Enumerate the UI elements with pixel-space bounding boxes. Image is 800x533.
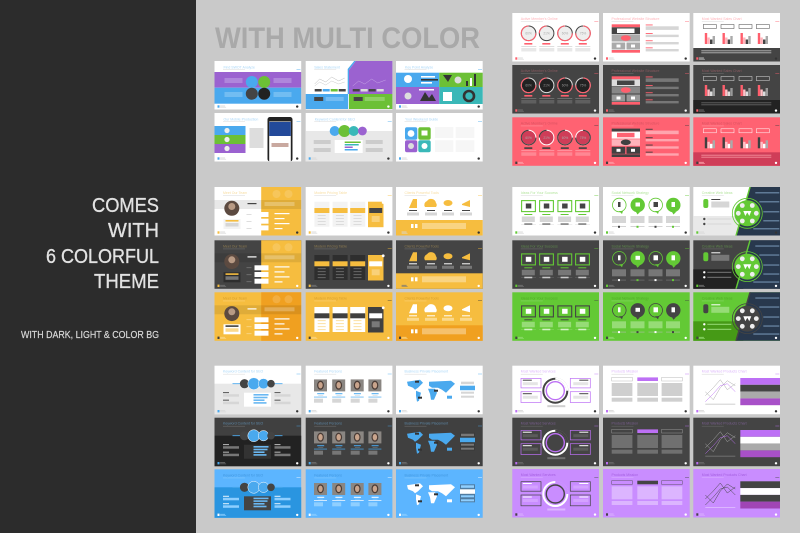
slide: yellow tools dark bbox=[396, 240, 483, 289]
slide: blue seo color bbox=[214, 469, 301, 518]
slide: green social light bbox=[603, 187, 690, 236]
slide: red chart light: Most Wanted Sales Chart bbox=[702, 17, 742, 21]
slide: purple chart color bbox=[693, 469, 780, 518]
slide: red rings light: Active Member's Online bbox=[521, 17, 558, 21]
slide: blue seo color: Keyword Content for SEO bbox=[223, 473, 264, 477]
slide: yellow pricing light: Modern Pricing Table bbox=[314, 191, 347, 195]
slide: purple mission light bbox=[603, 366, 690, 414]
slide: mobile: Our Mobile Production bbox=[224, 118, 258, 122]
slide: yellow pricing color bbox=[306, 292, 392, 341]
slide: red structure dark bbox=[603, 65, 690, 114]
slide: purple mission dark bbox=[603, 418, 690, 466]
slide: purple services light bbox=[512, 366, 599, 414]
slide: yellow pricing light bbox=[306, 187, 392, 236]
slide: green social color: Social Network Strategy bbox=[612, 296, 649, 300]
slide: mobile bbox=[214, 113, 301, 162]
slide: yellow team light bbox=[214, 187, 301, 236]
slide: yellow tools light bbox=[396, 187, 483, 236]
slide: swot: Find SWOT Analyze bbox=[224, 66, 255, 70]
slide: sales: Sales Statement bbox=[314, 66, 340, 70]
slide: yellow pricing color: Modern Pricing Table bbox=[314, 296, 347, 300]
slide: blue map light bbox=[396, 366, 483, 414]
slide: green ideas color bbox=[512, 292, 599, 341]
slide: weekend: Your Weekend Guide bbox=[405, 118, 438, 122]
slide: swot bbox=[214, 61, 301, 110]
slide: red rings dark: Active Member's Online bbox=[521, 69, 558, 73]
sidebar subheading: WITH DARK, LIGHT & COLOR BG bbox=[21, 329, 159, 341]
slide: blue seo dark bbox=[214, 418, 301, 466]
slide: blue map light: Business Private Placement bbox=[404, 370, 448, 374]
slide: red chart dark bbox=[693, 65, 780, 114]
slide: green web dark: Creative Web Ideas bbox=[702, 244, 733, 248]
slide: yellow tools color: Clients Powerful Tools bbox=[404, 296, 439, 300]
slide: weekend bbox=[396, 113, 483, 162]
slide: red structure color bbox=[603, 117, 690, 166]
sidebar headline: 6 COLORFUL bbox=[46, 246, 159, 268]
slide: yellow pricing dark: Modern Pricing Table bbox=[314, 244, 347, 248]
slide: red chart color bbox=[693, 117, 780, 166]
sidebar headline bbox=[46, 195, 159, 293]
slide: red structure color: Professional Website Structure bbox=[612, 121, 660, 125]
slide: purple mission dark: Products Mission bbox=[612, 422, 638, 426]
slide: yellow tools light: Clients Powerful Tools bbox=[404, 191, 439, 195]
slide: blue map dark bbox=[396, 418, 483, 466]
slide: purple chart light: Most Wanted Products Chart bbox=[702, 370, 747, 374]
red theme group bbox=[512, 13, 780, 166]
slide: yellow tools dark: Clients Powerful Tools bbox=[404, 244, 439, 248]
slide: red structure dark: Professional Website Structure bbox=[612, 69, 660, 73]
slide: yellow team dark bbox=[214, 240, 301, 289]
slide: blue persons light: Featured Persons bbox=[314, 370, 342, 374]
slide: purple chart light bbox=[693, 366, 780, 414]
yellow theme group bbox=[214, 187, 483, 341]
slide: purple services dark bbox=[512, 418, 599, 466]
left dark sidebar bbox=[0, 0, 196, 533]
slide: blue persons color bbox=[306, 469, 392, 518]
slide: red rings color: Active Member's Online bbox=[521, 121, 558, 125]
slide: red chart color: Most Wanted Sales Chart bbox=[702, 121, 742, 125]
slide: yellow team light: Meet Our Team bbox=[223, 191, 247, 195]
slide: yellow team color: Meet Our Team bbox=[223, 296, 247, 300]
slide: green ideas color: Ideas For Your Success bbox=[521, 296, 558, 300]
slide: yellow tools color bbox=[396, 292, 483, 341]
slide: blue persons dark: Featured Persons bbox=[314, 422, 342, 426]
slide: purple services color: Most Wanted Services bbox=[521, 473, 556, 477]
blue theme group bbox=[214, 366, 483, 518]
slide: seo: Keyword Content for SEO bbox=[315, 118, 355, 122]
slide: sales bbox=[306, 61, 392, 110]
green theme group bbox=[512, 187, 780, 341]
slide: red rings light bbox=[512, 13, 599, 62]
slide: yellow team color bbox=[214, 292, 301, 341]
slide: green ideas dark bbox=[512, 240, 599, 289]
slide: purple chart color: Most Wanted Products Chart bbox=[702, 473, 747, 477]
slide: blue persons color: Featured Persons bbox=[314, 473, 342, 477]
purple theme group bbox=[512, 366, 780, 518]
slide: key points: Key Point Analyze bbox=[405, 66, 433, 70]
slide: purple services light: Most Wanted Services bbox=[521, 370, 556, 374]
slide: blue map color: Business Private Placement bbox=[404, 473, 448, 477]
slide: purple mission color: Products Mission bbox=[612, 473, 638, 477]
slide: blue seo light bbox=[214, 366, 301, 414]
slide: red chart dark: Most Wanted Sales Chart bbox=[702, 69, 742, 73]
slide: blue seo dark: Keyword Content for SEO bbox=[223, 422, 264, 426]
slide: green social light: Social Network Strategy bbox=[612, 191, 649, 195]
slide: red rings color bbox=[512, 117, 599, 166]
slide: green ideas dark: Ideas For Your Success bbox=[521, 244, 558, 248]
slide: green web dark bbox=[693, 240, 780, 289]
slide: green web light bbox=[693, 187, 780, 236]
multi color group bbox=[214, 61, 483, 162]
slide: blue persons light bbox=[306, 366, 392, 414]
slide: green web color bbox=[693, 292, 780, 341]
slide: seo bbox=[306, 113, 392, 162]
main heading: WITH MULTI COLOR bbox=[215, 22, 480, 55]
sidebar headline: THEME bbox=[94, 271, 159, 293]
slide: red structure light bbox=[603, 13, 690, 62]
slide: green social dark: Social Network Strategy bbox=[612, 244, 649, 248]
slide: blue persons dark bbox=[306, 418, 392, 466]
slide: green ideas light bbox=[512, 187, 599, 236]
sidebar headline: WITH bbox=[108, 220, 159, 242]
slide: green web light: Creative Web Ideas bbox=[702, 191, 733, 195]
slide: purple mission color bbox=[603, 469, 690, 518]
slide: green social dark bbox=[603, 240, 690, 289]
slide: purple chart dark: Most Wanted Products Chart bbox=[702, 422, 747, 426]
slide: red chart light bbox=[693, 13, 780, 62]
sidebar headline: COMES bbox=[92, 195, 159, 217]
slide: red rings dark bbox=[512, 65, 599, 114]
slide: purple services dark: Most Wanted Services bbox=[521, 422, 556, 426]
slide: yellow team dark: Meet Our Team bbox=[223, 244, 247, 248]
slide: key points bbox=[396, 61, 483, 110]
slide: red structure light: Professional Website Structure bbox=[612, 17, 660, 21]
slide: purple chart dark bbox=[693, 418, 780, 466]
slide: green social color bbox=[603, 292, 690, 341]
slide: blue map color bbox=[396, 469, 483, 518]
slide: purple mission light: Products Mission bbox=[612, 370, 638, 374]
slide: blue seo light: Keyword Content for SEO bbox=[223, 370, 264, 374]
slide: blue map dark: Business Private Placement bbox=[404, 422, 448, 426]
slide: purple services color bbox=[512, 469, 599, 518]
slide: yellow pricing dark bbox=[306, 240, 392, 289]
slide: green ideas light: Ideas For Your Success bbox=[521, 191, 558, 195]
slide: green web color: Creative Web Ideas bbox=[702, 296, 733, 300]
